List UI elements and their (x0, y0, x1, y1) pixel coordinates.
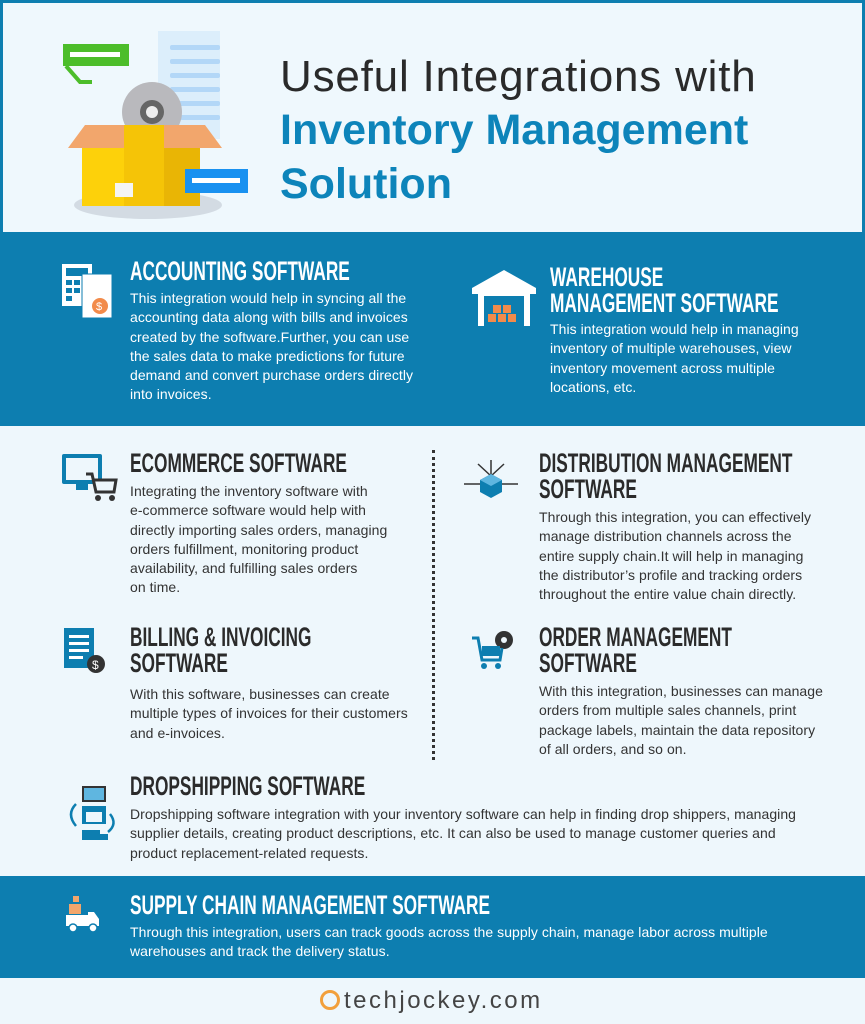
text: accounting: created by the software.Further, you can use (130, 329, 409, 345)
title: Solution (280, 160, 452, 208)
text: order: orders from multiple sales channels, print (539, 702, 796, 718)
text: distribution: throughout the entire value chain directly. (539, 586, 796, 602)
text: distribution: the distributor’s profile and tracking orders (539, 567, 802, 583)
icon: accounting: $ (96, 301, 102, 313)
text: ecommerce (130, 483, 387, 595)
text: warehouse: inventory movement across multiple (550, 360, 775, 376)
text: ecommerce: on time. (130, 579, 180, 595)
blue band: supply chain (0, 876, 865, 978)
text: accounting: into invoices. (130, 386, 212, 402)
text: supply chain: warehouses and track the delivery status. (130, 943, 390, 959)
title: Inventory Management (280, 106, 748, 154)
text: accounting: the sales data to make predictions for future (130, 348, 405, 364)
heading: warehouse: MANAGEMENT SOFTWARE (550, 288, 778, 318)
heading: order: ORDER MANAGEMENT (539, 622, 732, 652)
icon: accounting (62, 264, 112, 318)
icon: truck (66, 896, 99, 932)
text: dropshipping: product replacement-related requests. (130, 845, 368, 861)
text: billing: With this software, businesses can create (130, 686, 390, 702)
text: order (539, 683, 823, 757)
text: warehouse: inventory of multiple warehouses, view (550, 340, 792, 356)
text: order: of all orders, and so on. (539, 741, 687, 757)
heading: supply chain: SUPPLY CHAIN MANAGEMENT SOFTWARE (130, 890, 490, 920)
text: accounting: This integration would help in syncing all the (130, 290, 406, 306)
section: ecommerce (62, 448, 387, 595)
heading: distribution: DISTRIBUTION MANAGEMENT (539, 448, 792, 478)
section: dropshipping (70, 771, 796, 861)
text: billing: and e-invoices. (130, 725, 225, 741)
title: Useful Integrations with (280, 52, 757, 101)
heading: billing (130, 622, 311, 678)
section: order (472, 622, 823, 757)
heading: warehouse: WAREHOUSE (550, 262, 663, 292)
icon: box with gear (63, 31, 248, 219)
text: ecommerce: availability, and fulfilling sales orders (130, 560, 357, 576)
title (280, 52, 757, 208)
heading: ecommerce: ECOMMERCE SOFTWARE (130, 448, 347, 478)
text: supply chain: Through this integration, users can track goods across the supply chain, manage labor across multiple (130, 924, 768, 940)
text: dropshipping: supplier details, creating product descriptions, etc. It can also be used to manage customer queries and (130, 825, 776, 841)
text: ecommerce: e-commerce software would help with (130, 502, 366, 518)
text: warehouse: locations, etc. (550, 379, 636, 395)
heading: billing: BILLING & INVOICING (130, 622, 311, 652)
heading: order: SOFTWARE (539, 648, 637, 678)
text: billing: multiple types of invoices for their customers (130, 705, 408, 721)
icon: billing: $ (92, 658, 99, 672)
text: ecommerce: Integrating the inventory software with (130, 483, 368, 499)
text: ecommerce: directly importing sales orders, managing (130, 522, 387, 538)
icon: dropshipping (70, 786, 115, 840)
text: distribution (539, 509, 811, 602)
text: billing (130, 686, 408, 741)
text: dropshipping: Dropshipping software integration with your inventory software can help in finding drop shippers, managing (130, 806, 796, 822)
text: accounting (130, 290, 413, 402)
text: accounting: accounting data along with bills and invoices (130, 309, 408, 325)
text: warehouse (550, 321, 799, 395)
heading: accounting: ACCOUNTING SOFTWARE (130, 256, 350, 286)
heading: warehouse (550, 262, 778, 318)
text: distribution: manage distribution channels across the (539, 528, 792, 544)
text: accounting: demand and convert purchase orders directly (130, 367, 413, 383)
blue band: accounting and warehouse (0, 232, 865, 426)
icon: warehouse (472, 270, 536, 326)
text: distribution: Through this integration, you can effectively (539, 509, 811, 525)
icon: billing (64, 628, 105, 673)
text: order: With this integration, businesses can manage (539, 683, 823, 699)
divider dotted (432, 450, 435, 760)
section: distribution (464, 448, 811, 602)
section: billing (64, 622, 408, 741)
heading: distribution: SOFTWARE (539, 474, 637, 504)
logo: techjockey: techjockey.com (344, 987, 543, 1014)
heading: distribution (539, 448, 792, 504)
text: supply chain (130, 924, 768, 959)
text: ecommerce: orders fulfillment, monitoring product (130, 541, 358, 557)
heading: dropshipping: DROPSHIPPING SOFTWARE (130, 771, 365, 801)
text: dropshipping (130, 806, 796, 861)
heading: billing: SOFTWARE (130, 648, 228, 678)
icon: ecommerce (62, 454, 118, 501)
icon: order (472, 631, 513, 669)
icon: distribution (464, 460, 518, 498)
header panel (0, 0, 865, 232)
text: warehouse: This integration would help in managing (550, 321, 799, 337)
text: distribution: entire supply chain.It will help in managing (539, 548, 803, 564)
heading: order (539, 622, 732, 678)
text: order: package labels, maintain the data repository (539, 722, 815, 738)
